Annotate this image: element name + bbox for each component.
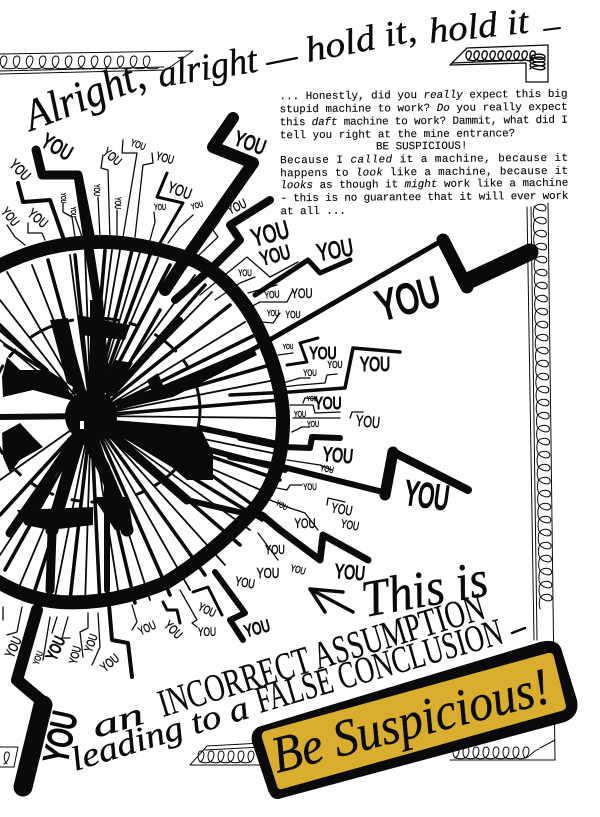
labels: YOU lettering: YOU [360, 352, 390, 376]
labels: YOU lettering: YOU [161, 618, 185, 642]
labels: YOU lettering: YOU [231, 127, 269, 159]
labels: YOU lettering: YOU [113, 197, 121, 209]
labels: YOU lettering: YOU [267, 310, 279, 318]
callout: This is an incorrect assumption leading to a false conclusion: This is [357, 551, 492, 629]
labels: YOU lettering: YOU [42, 633, 69, 663]
labels: YOU lettering [0, 127, 451, 766]
callout: This is an incorrect assumption leading to a false conclusion [67, 551, 525, 779]
heading: Alright, alright, hold it, hold it: hold it [427, 1, 531, 51]
text block: typewritten note: this daft machine to work? Dammit, what did I [280, 115, 568, 129]
labels: YOU lettering: YOU [371, 267, 445, 330]
labels: YOU lettering: YOU [314, 394, 342, 414]
labels: YOU lettering: YOU [37, 129, 77, 165]
labels: YOU lettering: YOU [59, 193, 66, 203]
labels: YOU lettering: YOU [243, 617, 272, 642]
arms: thin stair-step lines [3, 140, 363, 665]
labels: YOU lettering: YOU [294, 411, 306, 419]
wheel: inner broken ring [0, 318, 200, 502]
text block: typewritten note: tell you right at the mine entrance? [280, 128, 515, 142]
labels: YOU lettering: YOU [92, 184, 100, 196]
labels: YOU lettering: YOU [402, 474, 451, 517]
labels: YOU lettering: YOU [198, 627, 216, 639]
text block: typewritten note: happens to look like a machine, because it [280, 166, 568, 180]
labels: YOU lettering: YOU [265, 544, 285, 557]
labels: YOU lettering: YOU [294, 515, 316, 531]
labels: YOU lettering: YOU [315, 234, 355, 267]
labels: YOU lettering: YOU [303, 482, 317, 492]
arrow: pointing at the wheel [310, 589, 353, 612]
labels: YOU lettering: YOU [6, 156, 34, 184]
wheel: thin spokes [0, 250, 283, 605]
labels: YOU lettering: YOU [1, 634, 25, 660]
labels: YOU lettering: YOU [37, 708, 85, 766]
labels: YOU lettering: YOU [69, 207, 76, 217]
labels: YOU lettering: YOU [68, 645, 85, 666]
callout: Be Suspicious yellow sign: Be Suspicious! [266, 658, 556, 785]
labels: YOU lettering: YOU [264, 288, 280, 301]
heading: Alright, alright, hold it, hold it [14, 1, 560, 141]
labels: YOU lettering: YOU [137, 619, 158, 639]
labels: YOU lettering: YOU [154, 204, 166, 212]
labels: YOU lettering: YOU [334, 559, 366, 585]
wheel: medium spokes [0, 250, 280, 605]
callout: This is an incorrect assumption leading to a false conclusion: an [88, 695, 148, 745]
text block: typewritten note: Because I called it a machine, because it [280, 153, 568, 167]
labels: YOU lettering: YOU [234, 575, 256, 592]
labels: YOU lettering: YOU [129, 137, 147, 153]
labels: YOU lettering: YOU [31, 650, 45, 666]
labels: YOU lettering: YOU [330, 500, 354, 519]
labels: YOU lettering: YOU [291, 285, 313, 301]
chart: wheel machine with spokes [0, 118, 530, 787]
labels: YOU lettering: YOU [238, 268, 252, 278]
wheel: outer rim [0, 242, 283, 602]
labels: YOU lettering: YOU [100, 146, 124, 169]
labels: YOU lettering: YOU [165, 177, 194, 203]
labels: YOU lettering: YOU [340, 518, 360, 534]
labels: YOU lettering: YOU [154, 151, 175, 168]
labels: YOU lettering: YOU [307, 421, 319, 429]
labels: YOU lettering: YOU [274, 500, 289, 513]
labels: YOU lettering: YOU [307, 396, 317, 403]
text block: typewritten note: stupid machine to work? Do you really expect [280, 102, 568, 116]
arms: thick zig-zag arms [17, 118, 530, 787]
wheel: hub and ink blots [65, 390, 117, 442]
labels: YOU lettering: YOU [24, 205, 51, 231]
text block: typewritten note: BE SUSPICIOUS! [376, 141, 468, 153]
labels: YOU lettering: YOU [303, 368, 317, 378]
labels: YOU lettering: YOU [248, 214, 292, 252]
labels: YOU lettering: YOU [83, 633, 101, 654]
wheel: thick spokes [52, 416, 127, 530]
labels: YOU lettering: YOU [283, 344, 293, 351]
labels: YOU lettering: YOU [98, 652, 122, 675]
labels: YOU lettering: YOU [309, 344, 337, 364]
text block: typewritten note: at all ... [280, 206, 346, 218]
text block: typewritten note [279, 89, 569, 218]
labels: YOU lettering: YOU [355, 411, 381, 431]
labels: YOU lettering: YOU [257, 240, 293, 270]
labels: YOU lettering: YOU [285, 309, 301, 320]
labels: YOU lettering: YOU [225, 197, 249, 218]
labels: YOU lettering: YOU [257, 564, 279, 581]
labels: YOU lettering: YOU [196, 601, 217, 621]
heading: Alright, alright, hold it, hold it: hold it, [302, 9, 419, 70]
text block: typewritten note: looks as though it might work like a machine [280, 178, 568, 192]
heading: Alright, alright, hold it, hold it: alright [155, 39, 262, 96]
text block: typewritten note: ... Honestly, did you really expect this big [279, 89, 568, 103]
labels: YOU lettering: YOU [319, 463, 335, 475]
labels: YOU lettering: YOU [327, 359, 343, 370]
heading: Alright, alright, hold it, hold it: Alright, [14, 50, 151, 141]
text block: typewritten note: - this is no guarantee that it will ever work [280, 191, 568, 205]
callout: This is an incorrect assumption leading to a false conclusion: leading to a [67, 689, 253, 779]
labels: YOU lettering: YOU [289, 562, 307, 577]
labels: YOU lettering: YOU [190, 201, 204, 212]
labels: YOU lettering: YOU [322, 442, 354, 468]
